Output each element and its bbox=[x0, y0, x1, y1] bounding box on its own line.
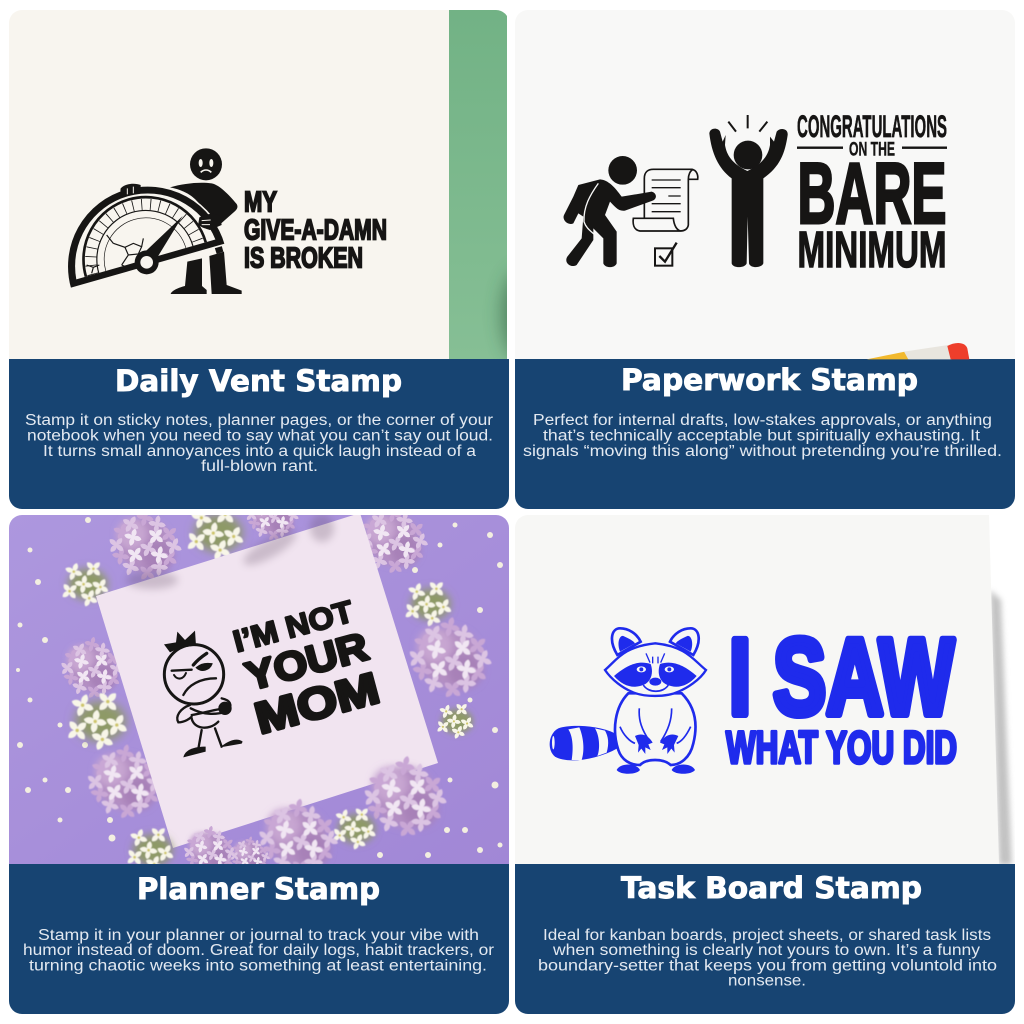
description bbox=[23, 927, 494, 974]
feet bbox=[617, 764, 695, 774]
stamp graphic: grumpy crowned character bbox=[164, 594, 384, 757]
heading: Paperwork Stamp bbox=[621, 363, 918, 397]
arms bbox=[620, 708, 691, 743]
description: that’s technically acceptable but spiritually exhausting. It bbox=[543, 428, 981, 444]
stamp graphic: raccoon bbox=[550, 628, 706, 774]
stamp text: i'm not your mom bbox=[230, 594, 384, 744]
stamp text: congratulations on the bare minimum bbox=[797, 108, 947, 278]
description: boundary-setter that keeps you from getting voluntold into bbox=[538, 958, 997, 974]
stamp graphic: broken gauge figure bbox=[48, 148, 242, 294]
stamp text: my give-a-damn is broken bbox=[244, 186, 387, 274]
description: Ideal for kanban boards, project sheets, or shared task lists bbox=[543, 927, 991, 944]
stamp text: i'm not your mom: YOUR bbox=[241, 625, 373, 699]
ears bbox=[612, 628, 699, 655]
stamp text: congratulations on the bare minimum: MINIMUM bbox=[798, 221, 946, 278]
description: nonsense. bbox=[728, 972, 806, 990]
panel: planner stamp bbox=[9, 487, 509, 1014]
heading: Task Board Stamp bbox=[621, 871, 922, 905]
description: Stamp it in your planner or journal to track your vibe with bbox=[38, 927, 479, 944]
pencil bbox=[867, 352, 908, 359]
heading: Daily Vent Stamp bbox=[115, 364, 402, 398]
cracks bbox=[87, 235, 143, 273]
figure bbox=[170, 148, 242, 294]
lilac flowers over card bbox=[127, 756, 447, 864]
description: notebook when you need to say what you can’t say out loud. bbox=[27, 428, 493, 444]
lilac flowers behind card bbox=[62, 515, 492, 818]
checkbox bbox=[655, 243, 677, 266]
confetti dots bbox=[16, 517, 503, 858]
description: Perfect for internal drafts, low-stakes approvals, or anything bbox=[533, 412, 992, 429]
body bbox=[615, 693, 696, 765]
hands bbox=[120, 184, 141, 197]
description bbox=[25, 412, 493, 475]
stamp text: i saw what you did bbox=[726, 616, 957, 773]
stamp graphic: figures and scroll bbox=[564, 115, 969, 359]
description: It turns small annoyances into a quick laugh instead of a bbox=[43, 443, 477, 460]
description bbox=[538, 927, 997, 990]
card bbox=[96, 513, 438, 848]
stamp text: i'm not your mom: MOM bbox=[250, 664, 384, 744]
stamp text: my give-a-damn is broken: GIVE-A-DAMN bbox=[244, 214, 387, 246]
stamp text: my give-a-damn is broken: MY bbox=[244, 186, 277, 218]
panel: task board stamp bbox=[515, 515, 1015, 1014]
description: full-blown rant. bbox=[201, 458, 318, 475]
scroll bbox=[633, 169, 698, 231]
description: when something is clearly not yours to own. It’s a funny bbox=[552, 942, 980, 959]
stamp text: my give-a-damn is broken: IS BROKEN bbox=[244, 242, 363, 274]
description bbox=[523, 412, 1002, 460]
head bbox=[605, 643, 706, 696]
panel: daily vent stamp bbox=[9, 10, 542, 509]
description: turning chaotic weeks into something at least entertaining. bbox=[29, 958, 487, 974]
description: signals “moving this along” without pretending you’re thrilled. bbox=[523, 443, 1002, 460]
stamp text: congratulations on the bare minimum: ON THE bbox=[849, 138, 895, 160]
card shadows bbox=[126, 514, 334, 589]
description: Stamp it on sticky notes, planner pages, or the corner of your bbox=[25, 412, 493, 429]
description: humor instead of doom. Great for daily logs, habit trackers, or bbox=[23, 942, 494, 959]
heading: Planner Stamp bbox=[137, 872, 380, 906]
stamp text: i'm not your mom: I’M NOT bbox=[230, 594, 357, 659]
tail bbox=[550, 726, 617, 760]
panel: paperwork stamp bbox=[515, 114, 1015, 509]
mask bbox=[614, 663, 697, 687]
needle bbox=[141, 216, 183, 265]
gauge bbox=[48, 167, 225, 289]
bent figure bbox=[564, 156, 656, 267]
cheering figure bbox=[709, 129, 788, 267]
